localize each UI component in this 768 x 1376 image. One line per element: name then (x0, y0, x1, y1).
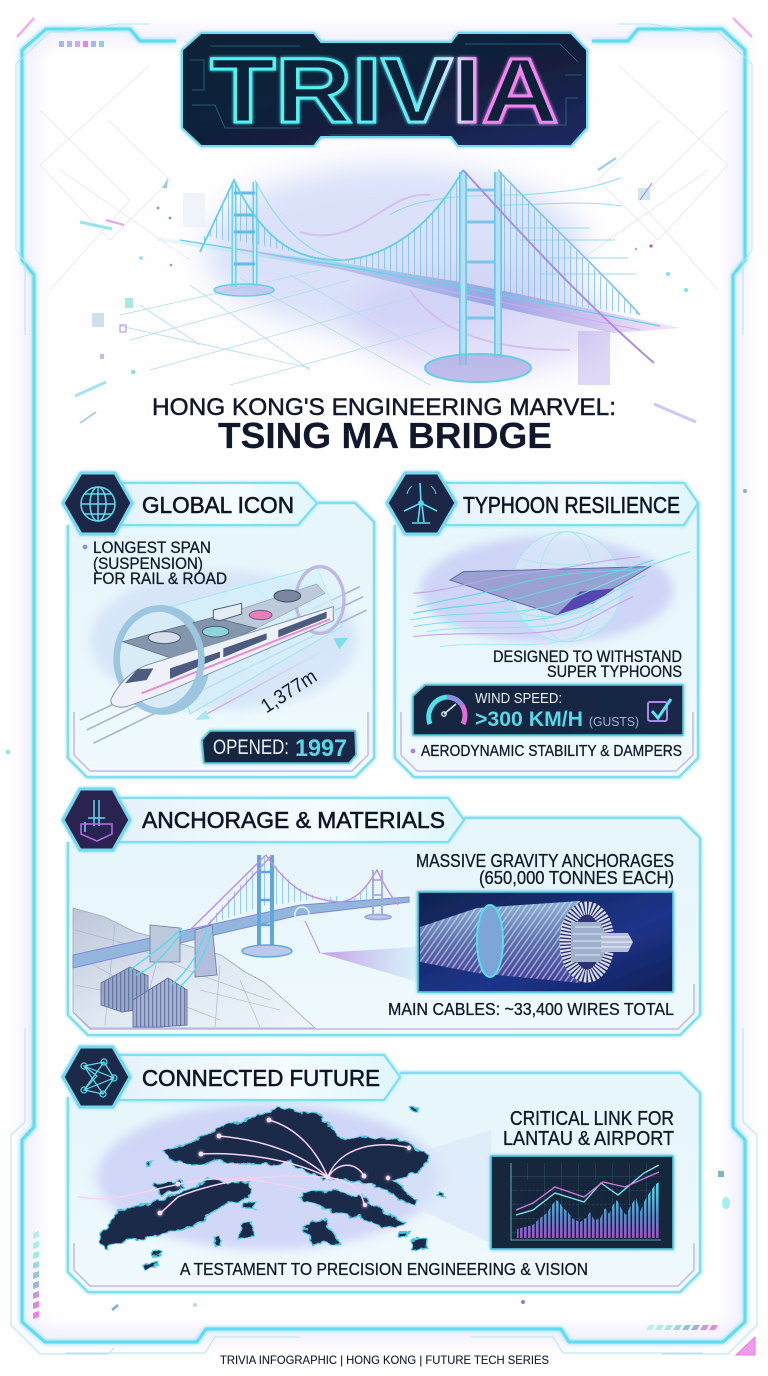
far pier (578, 331, 610, 385)
flow lines (410, 552, 690, 647)
chart line cyan (516, 1165, 659, 1215)
deck (157, 237, 681, 333)
length label: 1,377m (257, 666, 321, 718)
bullet text: LONGEST SPAN (93, 538, 211, 557)
icon: gauge (429, 697, 465, 724)
critical link text: LANTAU & AIRPORT (503, 1128, 674, 1150)
main cables (200, 170, 654, 363)
title plate (182, 33, 587, 146)
tunnel glow (90, 570, 357, 710)
lantau (99, 1180, 251, 1248)
chart line pink (516, 1172, 659, 1210)
map glow (97, 1103, 439, 1250)
callout line (305, 921, 320, 953)
map beam (392, 1130, 492, 1243)
bullet text: AERODYNAMIC STABILITY & DAMPERS (421, 743, 682, 760)
panel inner line (74, 1243, 694, 1286)
front ring (112, 604, 212, 716)
hanger curtain (200, 170, 640, 315)
top left status squares (59, 41, 104, 47)
panel inner line (74, 712, 368, 771)
chart panel (491, 1156, 673, 1249)
icon: globe (81, 487, 115, 521)
left tower (214, 182, 274, 296)
airflow glow (420, 537, 673, 643)
corner accents (17, 18, 752, 37)
hexagon badge (63, 1047, 130, 1107)
hero bridge illustration (75, 158, 696, 423)
anchorage text: MASSIVE GRAVITY ANCHORAGES (416, 851, 674, 871)
front ring near side (158, 609, 201, 711)
plate shape (182, 33, 587, 146)
bridge deck section (450, 567, 650, 615)
heading: CONNECTED FUTURE (142, 1065, 380, 1091)
icon: check box (648, 699, 671, 721)
heading tab (115, 483, 317, 525)
deck underside (557, 588, 615, 615)
outlying islands (143, 1107, 445, 1270)
bullet text: FOR RAIL & ROAD (93, 569, 227, 588)
subtitle line one: HONG KONG'S ENGINEERING MARVEL: (152, 394, 616, 421)
cable end (560, 901, 614, 983)
airflow illustration (410, 532, 690, 647)
train (111, 607, 333, 707)
designed text: DESIGNED TO WITHSTAND (493, 648, 682, 666)
floating hero particles (75, 158, 696, 423)
pink cables (190, 855, 398, 930)
opened badge: 1997 (295, 735, 347, 762)
connection arcs (78, 1120, 409, 1213)
anchorage text: (650,000 TONNES EACH) (479, 868, 674, 888)
panel frame (68, 818, 700, 1035)
tracks (80, 587, 367, 743)
upper deck (123, 617, 257, 662)
chart grid (511, 1163, 661, 1240)
panel inner line (401, 712, 693, 771)
hexagon badge (387, 473, 456, 534)
near tower (242, 855, 292, 957)
wind speed box: >300 KM/H (475, 708, 583, 731)
panel: anchorage and materials (63, 789, 700, 1035)
heading: GLOBAL ICON (142, 492, 294, 518)
panel: typhoon resilience (387, 473, 698, 777)
panel frame (68, 503, 374, 777)
length arrow (195, 638, 348, 720)
bottom right stripes (646, 1325, 718, 1330)
designed text (493, 648, 682, 681)
terrain mesh (75, 925, 280, 1027)
cable body (420, 901, 580, 983)
icon: anchorage (81, 800, 112, 841)
scattered particles (6, 489, 747, 1310)
title text: TRIVIA (210, 40, 558, 142)
inner core (601, 933, 633, 952)
map nodes (158, 1118, 411, 1215)
far tower (365, 870, 391, 920)
hangers (205, 855, 377, 926)
heading tab (115, 1055, 400, 1100)
panel: connected future (63, 1047, 700, 1292)
new territories (163, 1108, 430, 1207)
opened badge: OPENED: (213, 736, 289, 759)
cars and truck (148, 590, 301, 644)
subtitle line two: TSING MA BRIDGE (218, 415, 552, 456)
heading tab (115, 798, 464, 842)
tunnel tube (163, 567, 342, 714)
deck (73, 897, 409, 968)
glowing strands (130, 928, 212, 988)
bottom left stripes (33, 1231, 39, 1319)
wind speed box: WIND SPEED: (475, 690, 562, 707)
wind speed box: (GUSTS) (589, 715, 639, 729)
panel: global icon (63, 473, 374, 777)
callout ring (295, 907, 309, 921)
testament text: A TESTAMENT TO PRECISION ENGINEERING & VISION (180, 1259, 588, 1279)
chart bars (517, 1180, 660, 1238)
heading tab (440, 483, 698, 525)
critical link text (503, 1108, 674, 1150)
designed text: SUPER TYPHOONS (547, 663, 682, 681)
footer text: TRIVIA INFOGRAPHIC | HONG KONG | FUTURE TECH SERIES (220, 1353, 549, 1367)
road surface (210, 584, 325, 630)
background tech lines (40, 65, 728, 290)
inner strands (571, 922, 605, 962)
icon: wind turbine (404, 483, 437, 523)
illustration: bridge and anchorage (73, 855, 418, 1028)
train stripe (142, 619, 330, 693)
wireframe sphere (512, 532, 622, 642)
panel frame (68, 1073, 700, 1292)
train windows (125, 612, 327, 683)
hero glow (205, 165, 585, 335)
panel inner line (74, 984, 694, 1029)
bullet text (83, 538, 227, 588)
ground grid (120, 270, 520, 385)
bullet text: (SUSPENSION) (93, 554, 203, 573)
main cable image (418, 892, 673, 992)
anchor blocks (101, 925, 217, 1027)
hong kong island (300, 1190, 405, 1230)
terrain (73, 908, 315, 1028)
back ring (296, 567, 344, 633)
land masses (99, 1107, 445, 1270)
hero lower glow (350, 265, 610, 375)
purple ribbon (300, 195, 570, 350)
hexagon badge (63, 789, 130, 850)
plate circuitry (190, 44, 582, 135)
wind speed box (413, 685, 683, 735)
callout beam (320, 947, 418, 982)
bottom-right pink triangle (736, 1337, 755, 1355)
anchorage text (416, 851, 674, 888)
opened badge (202, 731, 356, 763)
cable band (477, 905, 503, 977)
heading: ANCHORAGE & MATERIALS (142, 807, 445, 833)
heading: TYPHOON RESILIENCE (463, 492, 680, 518)
hexagon badge (63, 473, 132, 534)
map of hong kong (78, 1103, 492, 1270)
chart axes (511, 1163, 661, 1240)
icon: network (81, 1059, 117, 1097)
mid ring (213, 585, 273, 668)
main cables caption: MAIN CABLES: ~33,400 WIRES TOTAL (388, 999, 674, 1019)
panel frame (395, 503, 698, 777)
right tower (425, 172, 531, 382)
subtitle heading (152, 394, 616, 456)
data streams right (390, 178, 636, 274)
tunnel illustration (80, 567, 367, 743)
critical link text: CRITICAL LINK FOR (510, 1108, 674, 1130)
